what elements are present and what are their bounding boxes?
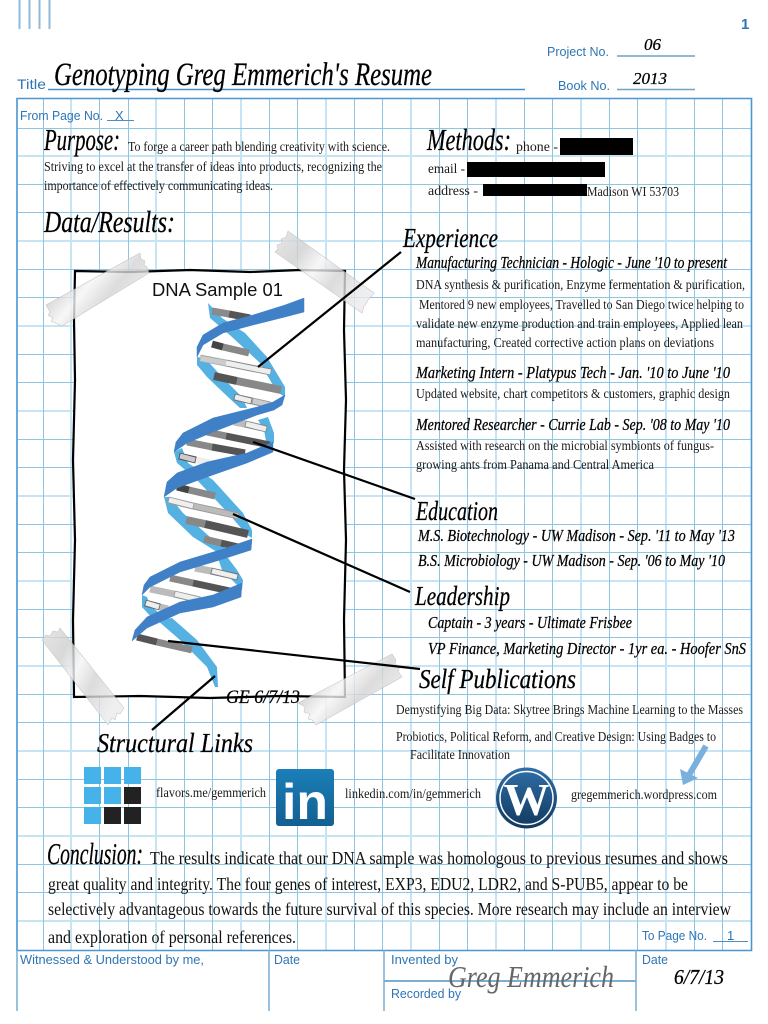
self publications section: Self Publications bbox=[419, 664, 576, 694]
invention date: 6/7/13 bbox=[674, 965, 724, 989]
dark strand bbox=[132, 298, 304, 641]
project number: Project No. bbox=[547, 44, 609, 59]
conclusion section: Conclusion: bbox=[47, 836, 143, 871]
experience section bbox=[402, 223, 745, 472]
methods section: Madison WI 53703 bbox=[587, 184, 679, 199]
linkedin link: linkedin.com/in/gemmerich bbox=[345, 786, 481, 801]
icon: wordpress bbox=[496, 768, 557, 828]
tape bottom left bbox=[42, 628, 124, 725]
self publications section bbox=[396, 664, 743, 762]
project number bbox=[547, 35, 695, 59]
methods section: phone - bbox=[516, 139, 559, 154]
witness and signature table bbox=[17, 950, 724, 1011]
connector: leadership bbox=[233, 514, 410, 592]
self publications section: Probiotics, Political Reform, and Creative Design: Using Badges to bbox=[396, 729, 716, 744]
structural links heading: Structural Links bbox=[97, 728, 253, 758]
from page number: X bbox=[115, 108, 124, 123]
education section bbox=[415, 496, 735, 570]
leadership section: Leadership bbox=[414, 581, 510, 611]
conclusion section: and exploration of personal references. bbox=[48, 927, 296, 947]
signature: Greg Emmerich bbox=[448, 959, 614, 994]
witness and signature table: Witnessed & Understood by me, bbox=[20, 952, 204, 967]
experience section: manufacturing, Created corrective action plans on deviations bbox=[416, 335, 714, 350]
conclusion section: The results indicate that our DNA sample was homologous to previous resumes and shows bbox=[150, 848, 728, 868]
methods section: Methods: bbox=[426, 122, 511, 157]
education section: Education bbox=[415, 496, 498, 526]
methods section: email - bbox=[428, 161, 465, 176]
witness and signature table: Date bbox=[274, 952, 300, 967]
to page number bbox=[642, 928, 748, 943]
tape top left bbox=[46, 253, 149, 326]
connector: education bbox=[253, 442, 415, 499]
leadership section: Captain - 3 years - Ultimate Frisbee bbox=[428, 613, 632, 632]
self publications section: Facilitate Innovation bbox=[410, 747, 510, 762]
title heading: Title bbox=[17, 76, 46, 92]
base pair rungs bbox=[137, 311, 281, 650]
witness and signature table: Date bbox=[642, 952, 668, 967]
book number: 2013 bbox=[633, 69, 667, 88]
book number bbox=[558, 69, 695, 93]
methods section: address - bbox=[428, 183, 479, 198]
sheet with rough border bbox=[73, 270, 346, 698]
experience section: Updated website, chart competitors & customers, graphic design bbox=[416, 386, 730, 401]
connector: self publications bbox=[168, 641, 420, 669]
icon: wordpress: W bbox=[504, 774, 550, 825]
experience section: Assisted with research on the microbial symbionts of fungus- bbox=[416, 438, 714, 453]
wordpress link: gregemmerich.wordpress.com bbox=[571, 787, 717, 802]
data results heading: Data/Results: bbox=[43, 204, 175, 239]
tape bottom right bbox=[298, 654, 402, 725]
purpose section: Purpose: bbox=[43, 122, 120, 157]
DNA helix bbox=[132, 298, 304, 687]
icon: flavors.me bbox=[84, 767, 141, 824]
leadership section bbox=[414, 581, 746, 658]
from page number: From Page No. bbox=[20, 108, 103, 123]
sample label: DNA Sample 01 bbox=[152, 280, 283, 300]
conclusion section bbox=[47, 836, 731, 947]
experience section: growing ants from Panama and Central America bbox=[416, 457, 654, 472]
methods section bbox=[426, 122, 679, 199]
witness and signature table: Invented by bbox=[391, 952, 458, 967]
book number: Book No. bbox=[558, 78, 610, 93]
light strand bbox=[142, 303, 285, 687]
title heading: Genotyping Greg Emmerich's Resume bbox=[54, 57, 432, 93]
notebook frame bbox=[17, 98, 752, 950]
connector: structural links bbox=[152, 676, 215, 730]
to page number: 1 bbox=[727, 928, 734, 943]
purpose section: To forge a career path blending creativity with science. bbox=[128, 139, 390, 154]
experience section: Experience bbox=[402, 223, 498, 253]
purpose section bbox=[43, 122, 390, 193]
arrow to wordpress link bbox=[680, 746, 706, 785]
purpose section: importance of effectively communicating ideas. bbox=[44, 178, 273, 193]
witness and signature table: Recorded by bbox=[391, 986, 461, 1001]
conclusion section: great quality and integrity. The four genes of interest, EXP3, EDU2, LDR2, and S-PUB5, appear to be bbox=[48, 874, 688, 894]
taped DNA sample sheet bbox=[42, 231, 402, 725]
purpose section: Striving to excel at the transfer of ideas into products, recognizing the bbox=[44, 159, 382, 174]
sample signature: GE 6/7/13 bbox=[226, 687, 300, 708]
to page number: To Page No. bbox=[642, 928, 707, 943]
page number: 1 bbox=[741, 16, 749, 33]
flavors link: flavors.me/gemmerich bbox=[156, 785, 266, 800]
icon: linkedin: in bbox=[282, 774, 328, 830]
connector: experience bbox=[258, 252, 401, 367]
tape top right bbox=[275, 231, 374, 313]
project number: 06 bbox=[644, 35, 662, 54]
